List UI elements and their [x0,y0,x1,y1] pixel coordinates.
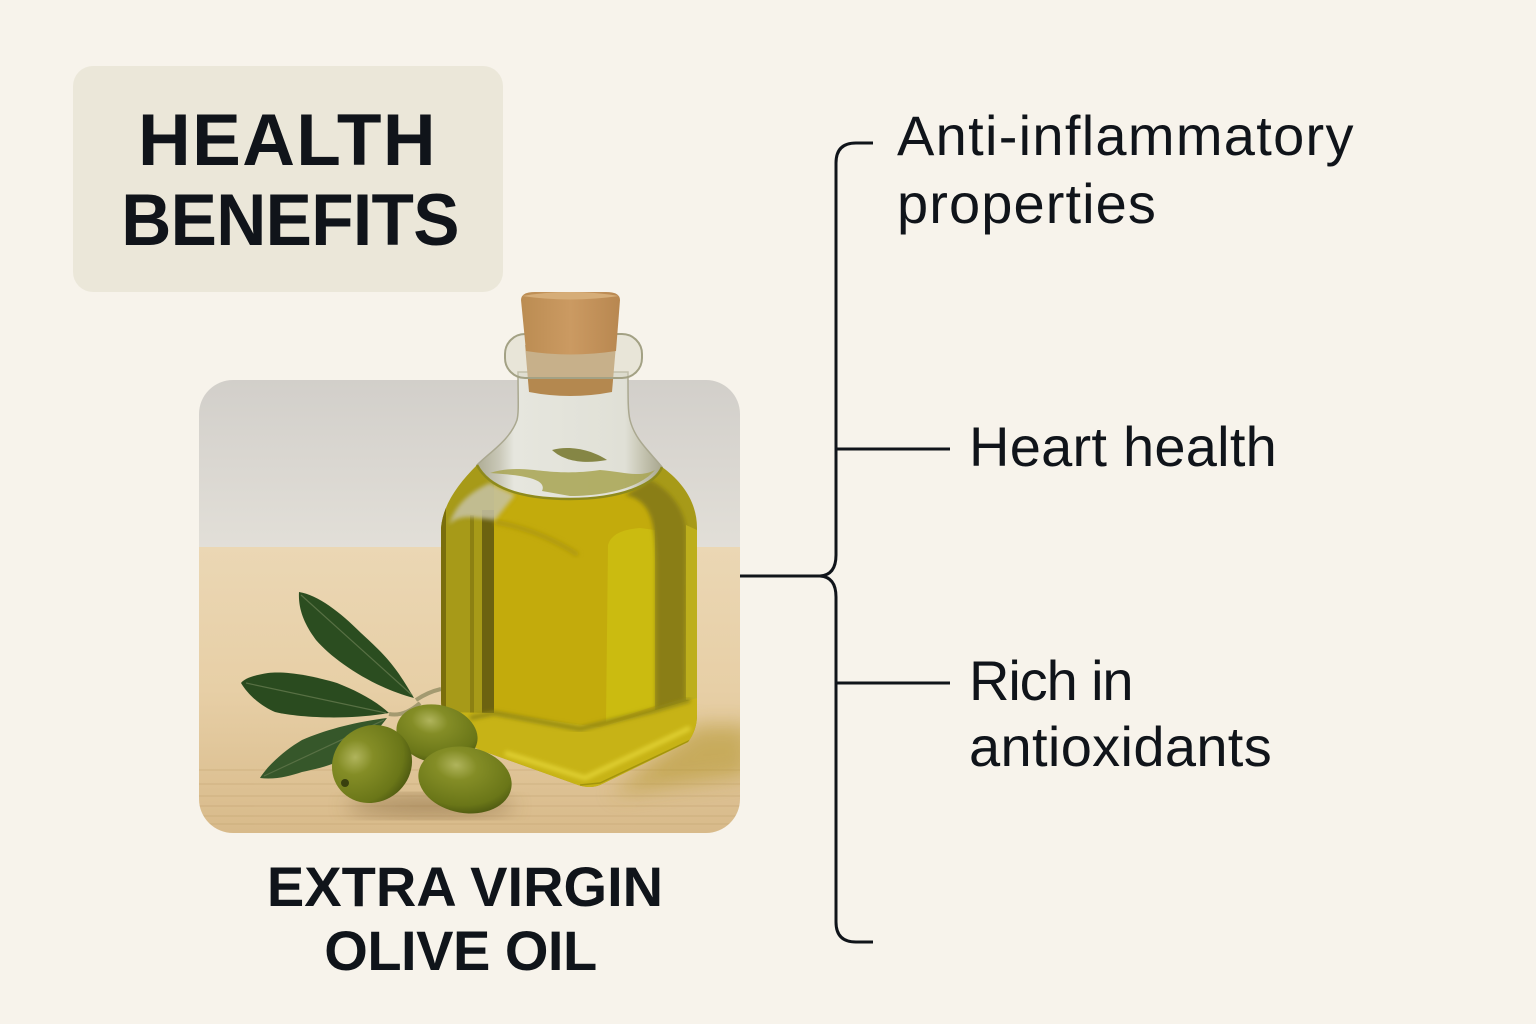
benefit: rich in antioxidants [969,649,1272,778]
benefit: anti-inflammatory: Anti-inflammatory [897,104,1355,167]
label line: olive oil: OLIVE OIL [324,919,597,982]
photo panel background [199,380,750,833]
olive oil illustration [199,142,950,944]
bottle lip [505,334,642,378]
benefit: anti-inflammatory [897,104,1355,235]
oil reflection in glass [490,469,655,496]
benefit: rich in antioxidants: Rich in [969,649,1132,712]
bottle base [460,698,697,787]
benefit: anti-inflammatory: properties [897,172,1157,235]
left side band [441,508,446,706]
label line: extra virgin: EXTRA VIRGIN [267,855,663,918]
title line: health: HEALTH [138,100,437,181]
icon: green olives [317,697,517,821]
product label [267,855,663,982]
oil body [441,440,698,792]
icon: cork [521,292,620,354]
icon: olive leaves [241,592,441,779]
grey glass highlight [449,483,515,525]
title panel [73,66,503,292]
icon: olive oil bottle [441,292,698,792]
benefit: heart health: Heart health [969,415,1277,478]
icon: cork lower part [525,345,616,396]
front panel [494,485,655,727]
bottle neck glass [477,372,662,499]
right dark band [625,480,686,710]
bracket connector [740,143,950,942]
benefit: rich in antioxidants: antioxidants [969,715,1272,778]
title line: benefits: BENEFITS [121,180,459,261]
